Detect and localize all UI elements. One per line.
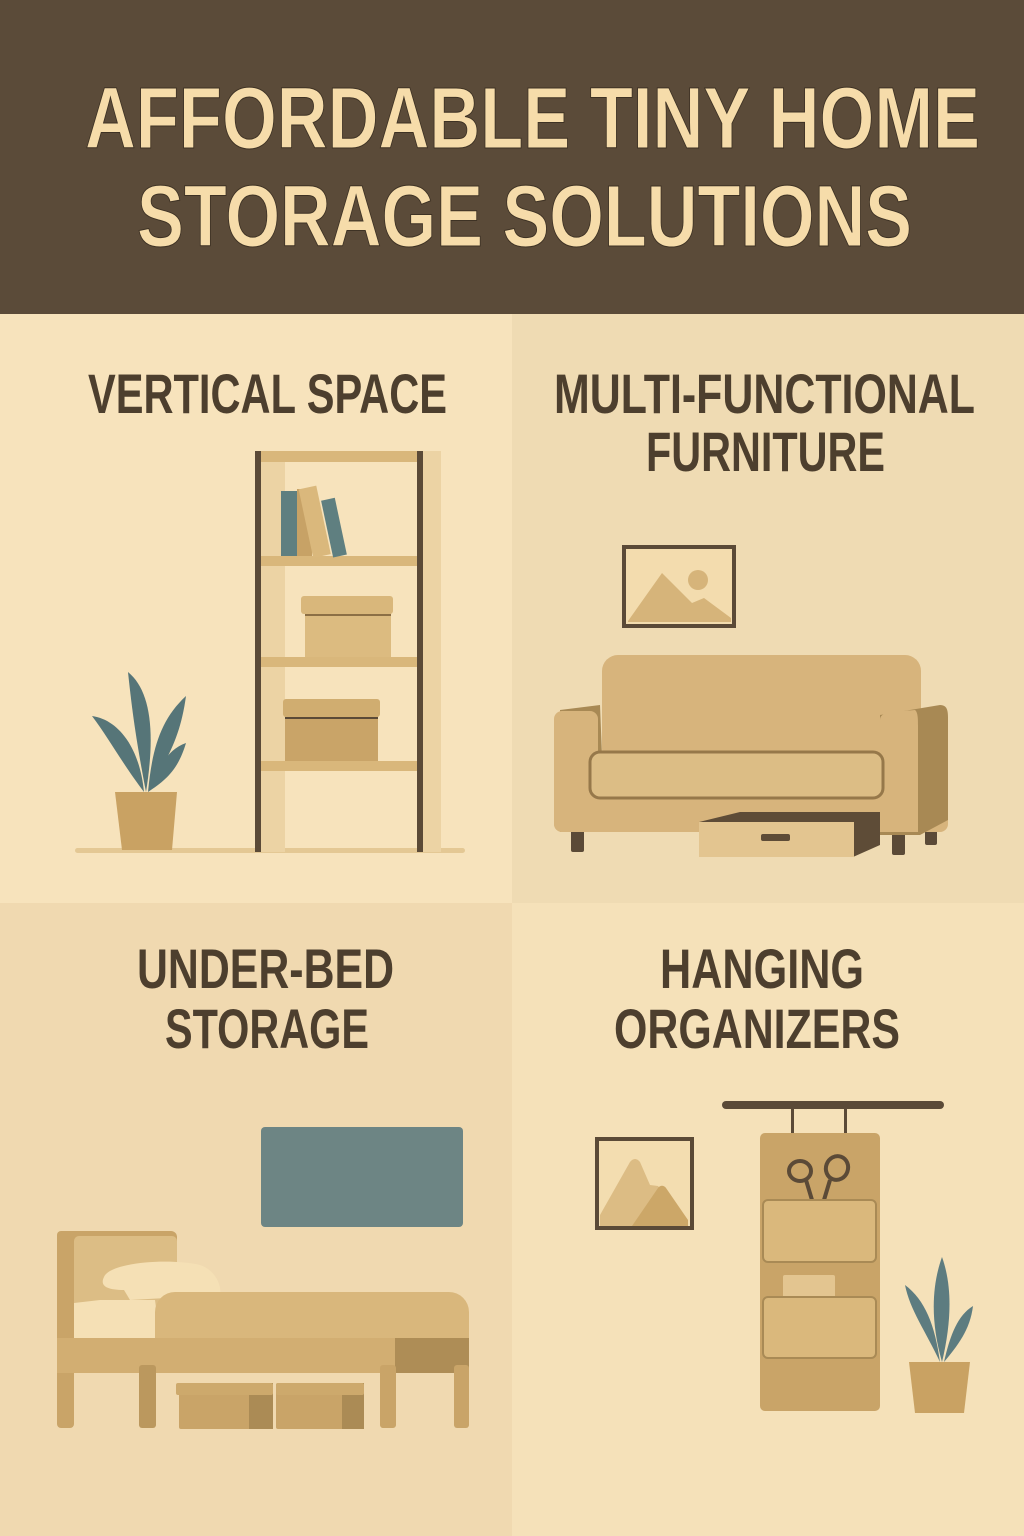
illustration: sofa with drawer xyxy=(554,655,948,857)
heading: hanging organizers: HANGING xyxy=(660,937,864,1000)
icon: picture frame xyxy=(597,1139,692,1228)
panel: vertical space xyxy=(0,314,512,903)
heading: vertical space: VERTICAL SPACE xyxy=(88,362,447,425)
heading: hanging organizers: ORGANIZERS xyxy=(614,997,900,1060)
icon: blue wall panel xyxy=(261,1127,463,1227)
heading: under-bed storage: UNDER-BED xyxy=(137,937,394,1000)
panel: multi-functional furniture xyxy=(512,314,1024,903)
heading: under-bed storage: STORAGE xyxy=(165,997,369,1060)
illustration: hanging organizer xyxy=(722,1101,944,1411)
title xyxy=(85,70,980,265)
icon: potted plant xyxy=(905,1257,973,1413)
illustration: bed with storage boxes xyxy=(57,1231,469,1429)
panel: hanging organizers xyxy=(512,903,1024,1536)
heading: multi-functional furniture: FURNITURE xyxy=(646,420,885,483)
panel: under-bed storage xyxy=(0,903,512,1536)
header band xyxy=(0,0,1024,314)
illustration: bookshelf with plant xyxy=(75,451,465,853)
heading: under-bed storage xyxy=(137,937,394,1060)
heading: hanging organizers xyxy=(614,937,900,1060)
heading: multi-functional furniture xyxy=(554,362,975,483)
icon: picture frame xyxy=(624,547,734,626)
